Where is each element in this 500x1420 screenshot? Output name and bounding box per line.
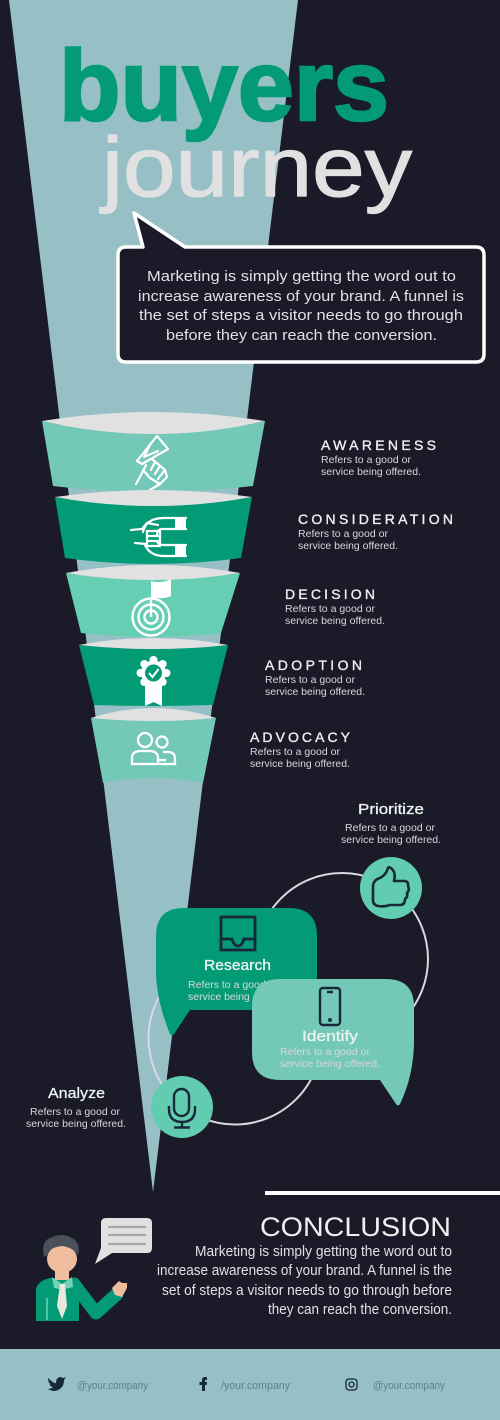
icon: facebook [200,1377,207,1391]
speech bubble: research [156,908,317,1036]
stage label: adoption: ADOPTION [265,657,362,673]
title line: buyers: buyers [59,30,389,142]
title line: journey: journey [99,120,412,214]
handle: facebook: /your.company [221,1380,290,1392]
analyze label [26,1085,126,1130]
stage label: decision: Refers to a good or [285,603,375,615]
stage band: advocacy [91,708,216,783]
speech bubble: identify [252,979,414,1106]
handle: twitter: @your.company [77,1380,148,1392]
conclusion heading: CONCLUSION [260,1212,451,1242]
icon: inbox tray [221,917,255,950]
icon: thumbs up [360,857,422,919]
stage label: awareness: Refers to a good or [321,454,411,466]
stage label: advocacy: service being offered. [250,758,350,770]
stage label: advocacy [250,729,351,770]
prioritize label: Prioritize [358,801,424,818]
speech bubble: research: Refers to a good or [188,979,278,991]
conclusion divider [265,1191,500,1195]
speech bubble: identify: Refers to a good or [280,1046,370,1058]
funnel background [9,0,298,1192]
stage label: awareness [321,437,436,478]
stage label: adoption [265,657,365,698]
prioritize label: service being offered. [341,834,441,846]
prioritize label: Refers to a good or [345,822,435,834]
handle: instagram: @your.company [373,1380,445,1392]
stage label: adoption: service being offered. [265,686,365,698]
stage band: consideration [55,490,252,564]
stage label: consideration: CONSIDERATION [298,511,453,527]
icon: instagram [346,1379,357,1390]
footer [0,1349,500,1420]
callout: intro [118,213,484,362]
conclusion text [157,1244,452,1318]
speech bubble: identify: service being offered. [280,1058,380,1070]
illustration: presenter [36,1218,152,1321]
icon: phone [320,988,340,1025]
stage label: advocacy: Refers to a good or [250,746,340,758]
speech bubble: research: service being offered. [188,991,288,1003]
stage label: decision: service being offered. [285,615,385,627]
conclusion text: set of steps a visitor needs to go through before [162,1283,452,1299]
prioritize label [341,801,441,846]
stage label: awareness: AWARENESS [321,437,436,453]
stage label: awareness: service being offered. [321,466,421,478]
callout: intro: the set of steps a visitor needs to go through [139,307,463,324]
stage label: advocacy: ADVOCACY [250,729,351,745]
stage band: decision [66,565,240,637]
stage label: consideration: Refers to a good or [298,528,388,540]
analyze label: Analyze [48,1085,105,1102]
callout: intro: before they can reach the conversion. [166,327,437,344]
stage band: adoption [79,638,228,706]
stage label: decision [285,586,385,627]
stage label: consideration: service being offered. [298,540,398,552]
speech bubble: identify: Identify [302,1028,359,1045]
conclusion text: increase awareness of your brand. A funnel is the [157,1263,452,1279]
stage label: consideration [298,511,453,552]
stage label: decision: DECISION [285,586,375,602]
stage label: adoption: Refers to a good or [265,674,355,686]
callout: intro: increase awareness of your brand. A funnel is [138,288,464,305]
speech bubble icon [95,1218,152,1264]
speech bubble: research: Research [204,957,271,974]
analyze label: service being offered. [26,1118,126,1130]
cycle ring: upper [256,873,428,1045]
analyze label: Refers to a good or [30,1106,120,1118]
stage band: awareness [42,412,265,492]
cycle ring: lower [148,952,322,1124]
title [59,30,412,214]
icon: microphone [151,1076,213,1138]
conclusion text: Marketing is simply getting the word out to [195,1244,452,1260]
funnel stages [42,412,265,783]
callout: intro: Marketing is simply getting the word out to [147,268,456,285]
icon: twitter [48,1377,66,1391]
conclusion text: they can reach the conversion. [268,1302,452,1318]
